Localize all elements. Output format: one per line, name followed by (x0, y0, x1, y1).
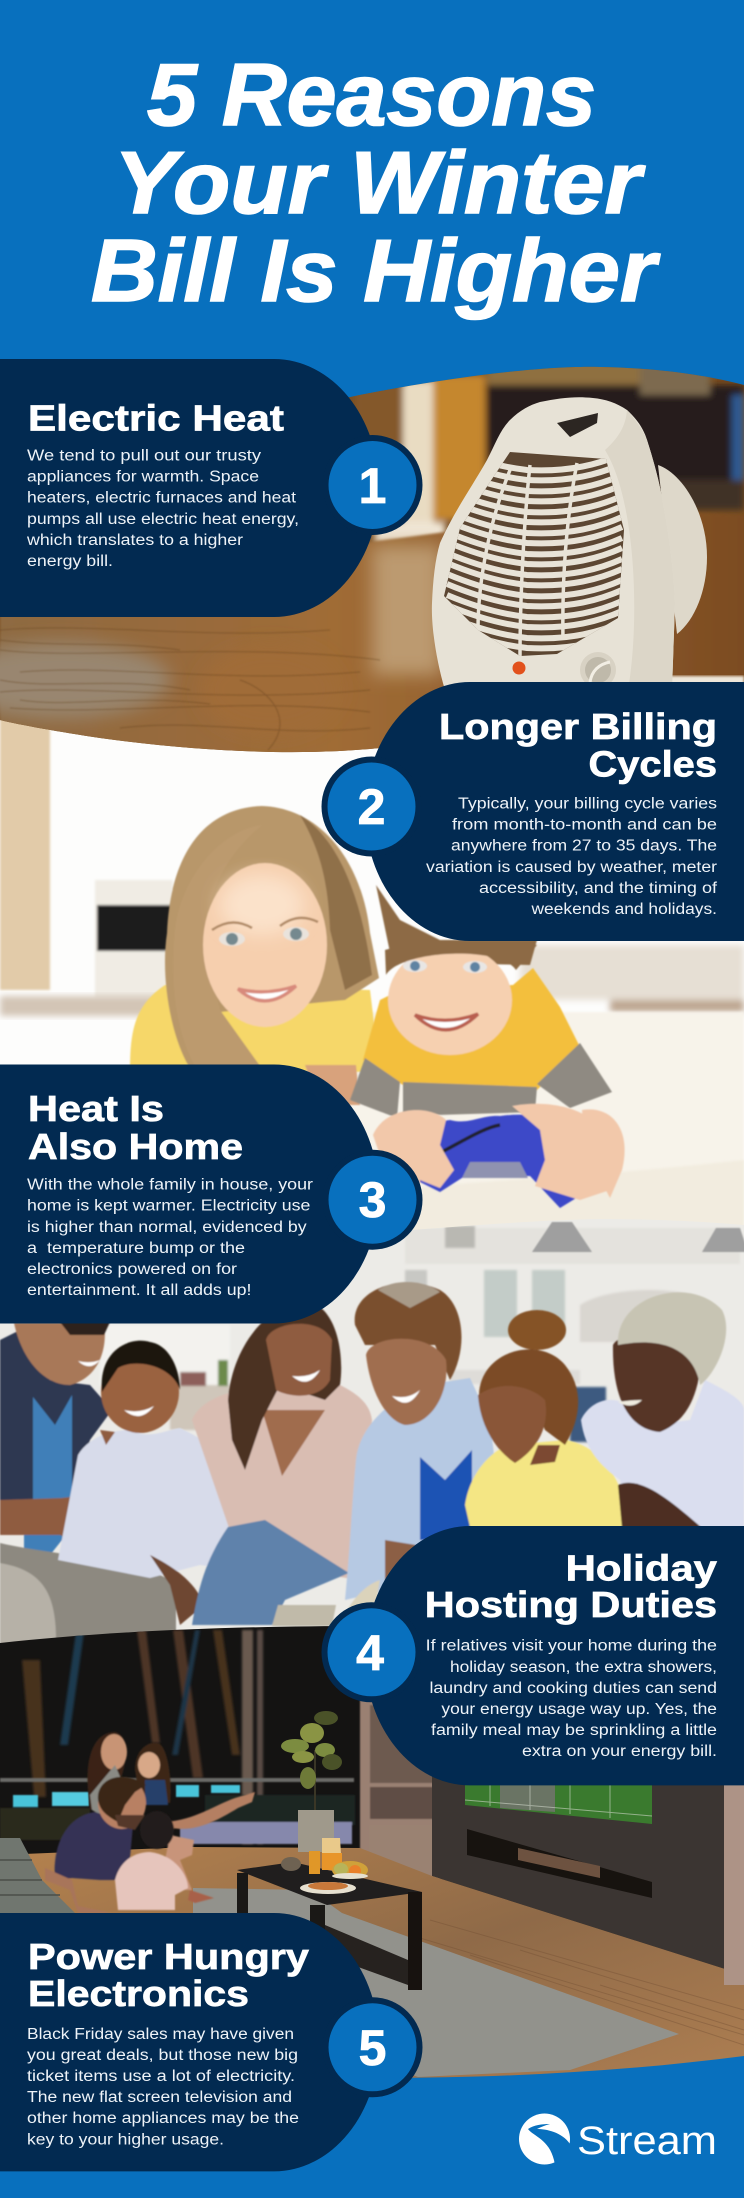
girl in yellow (465, 1310, 629, 1527)
kitchen cabinets (100, 1226, 740, 1442)
man (55, 1812, 133, 1880)
body text: holiday hosting duties: family meal may be sprinkling a little (431, 1722, 717, 1739)
heater indicator light (512, 662, 526, 674)
number badge 1: 1 (359, 458, 386, 514)
title: Bill Is Higher (91, 221, 661, 320)
heater (432, 397, 707, 690)
body text: power hungry electronics: ticket items use a lot of electricity. (27, 2068, 295, 2085)
body text: longer billing cycles (426, 796, 718, 918)
body text: heat is also home: entertainment. It all adds up! (27, 1282, 252, 1299)
number badge 5: 5 (359, 2020, 386, 2076)
body text: holiday hosting duties: If relatives visit your home during the (426, 1637, 717, 1654)
family on the floor (45, 1732, 255, 1913)
panel: power hungry electronics (0, 1913, 422, 2171)
logo: Stream: Stream (577, 2119, 717, 2163)
deck railing, bushes and pool lights (0, 1778, 355, 1844)
heading: holiday hosting duties (425, 1548, 717, 1625)
heading: heat is also home (28, 1088, 243, 1167)
panel: holiday hosting duties (322, 1526, 744, 1785)
photo: space heater on wooden table (0, 360, 744, 760)
heading: holiday hosting duties: Holiday (566, 1548, 717, 1589)
body text: longer billing cycles: Typically, your billing cycle varies (458, 796, 717, 812)
heading: longer billing cycles: Cycles (588, 744, 717, 784)
food and drinks (281, 1838, 368, 1894)
heading: power hungry electronics (28, 1936, 309, 2014)
body text: power hungry electronics: Black Friday sales may have given (27, 2026, 294, 2043)
body text: heat is also home: a temperature bump or the (27, 1240, 245, 1257)
sofa (0, 1838, 75, 1913)
body text: power hungry electronics: The new flat screen television and (27, 2089, 292, 2106)
photo: children playing video game (0, 700, 744, 1262)
girl's legs and shoe (165, 1835, 194, 1890)
family members (0, 1282, 744, 1650)
heading: longer billing cycles: Longer Billing (439, 706, 717, 747)
woman in pink (192, 1300, 372, 1626)
girl (130, 806, 380, 1105)
body text: holiday hosting duties: your energy usage way up. Yes, the (441, 1701, 717, 1718)
body text: holiday hosting duties (426, 1637, 717, 1760)
body text: power hungry electronics (27, 2026, 299, 2149)
body text: longer billing cycles: accessibility, and the timing of (479, 880, 718, 897)
man's outstretched arm (165, 1792, 255, 1829)
body text: longer billing cycles: variation is caused by weather, meter (426, 859, 717, 876)
blurred furniture (95, 880, 173, 998)
heading: power hungry electronics: Electronics (28, 1973, 249, 2014)
coffee table (237, 1838, 422, 1990)
number badge 5 (322, 1997, 422, 2097)
boy (350, 885, 612, 1118)
number badge 1 (322, 435, 422, 535)
body text: electric heat: which translates to a higher (26, 532, 243, 549)
carpet fluff (413, 1161, 744, 1230)
body text: longer billing cycles: weekends and holidays. (530, 901, 717, 918)
grandmother (340, 1282, 494, 1625)
body text: longer billing cycles: anywhere from 27 to 35 days. The (451, 838, 717, 855)
photo: multi-generation family on sofa (0, 1215, 744, 1665)
body text: electric heat: energy bill. (27, 553, 113, 570)
body text: heat is also home: is higher than normal, evidenced by (27, 1219, 307, 1236)
blue footer wave (0, 2056, 744, 2198)
title: Your Winter (114, 133, 646, 232)
floor band (0, 996, 170, 1016)
number badge 2 (322, 756, 422, 856)
body text: holiday hosting duties: holiday season, the extra showers, (450, 1659, 717, 1676)
heading: power hungry electronics: Power Hungry (28, 1936, 309, 1977)
body text: electric heat: pumps all use electric heat energy, (27, 511, 299, 528)
man left (0, 1322, 176, 1650)
woman (87, 1732, 126, 1810)
plant (281, 1711, 342, 1852)
heading: heat is also home: Heat Is (28, 1088, 164, 1129)
wood grain (0, 628, 380, 750)
number badge 2: 2 (358, 779, 385, 835)
grandfather (581, 1292, 744, 1530)
heater knob (580, 652, 616, 682)
body text: longer billing cycles: from month-to-month and can be (452, 816, 717, 834)
floor planks (410, 1920, 744, 2045)
body text: electric heat: appliances for warmth. Space (27, 468, 259, 486)
blurred room background (355, 360, 744, 544)
child (115, 1852, 188, 1910)
wood floor (28, 1847, 744, 2078)
icon: swoosh circle (519, 2114, 575, 2166)
body text: heat is also home: With the whole family in house, your (27, 1177, 313, 1194)
pendant lamps (532, 1222, 744, 1252)
body text: heat is also home: home is kept warmer. Electricity use (27, 1198, 310, 1214)
right shelf (724, 1780, 744, 1985)
rug (193, 1888, 679, 2077)
heading: longer billing cycles (439, 706, 717, 784)
shelf unit (360, 1700, 440, 1882)
wood table surface (0, 510, 744, 760)
heading: heat is also home: Also Home (28, 1126, 243, 1167)
body text: electric heat (26, 448, 299, 570)
heater grill (444, 452, 624, 656)
panel: heat is also home (0, 1064, 422, 1324)
body text: electric heat: heaters, electric furnaces and heat (27, 490, 297, 507)
body text: holiday hosting duties: extra on your energy bill. (522, 1743, 717, 1760)
body text: power hungry electronics: you great deals, but those new big (27, 2047, 298, 2064)
heading: electric heat: Electric Heat (28, 398, 284, 438)
TV (465, 1785, 652, 1824)
title (91, 45, 661, 320)
panel: electric heat (0, 359, 422, 617)
heater back dome (658, 465, 707, 634)
photo: family watching TV in living room (0, 1620, 744, 2100)
controller and hands (373, 1104, 625, 1208)
number badge 4: 4 (356, 1625, 384, 1681)
body text: holiday hosting duties: laundry and cooking duties can send (430, 1680, 717, 1697)
dark wall (432, 1776, 724, 1968)
heater body (432, 397, 675, 690)
sofa right (520, 945, 744, 1012)
trees behind window (22, 1630, 263, 1844)
boy in light shirt (58, 1341, 238, 1625)
curtain (0, 715, 50, 990)
fireplace slot (467, 1829, 652, 1898)
girl (135, 1743, 171, 1803)
number badge 4 (322, 1602, 422, 1702)
heading: holiday hosting duties: Hosting Duties (425, 1584, 717, 1625)
logo: Stream (519, 2114, 717, 2166)
body text: electric heat: We tend to pull out our trusty (27, 448, 261, 464)
panel: longer billing cycles (322, 682, 744, 941)
carpet (350, 1011, 744, 1188)
number badge 3 (322, 1150, 422, 1250)
body text: heat is also home: electronics powered on for (27, 1261, 237, 1278)
body text: heat is also home (27, 1177, 313, 1299)
body text: power hungry electronics: key to your higher usage. (27, 2132, 224, 2149)
number badge 3: 3 (359, 1172, 386, 1228)
body text: power hungry electronics: other home appliances may be the (27, 2110, 299, 2127)
title: 5 Reasons (147, 45, 596, 144)
heater handle hole (557, 413, 598, 437)
